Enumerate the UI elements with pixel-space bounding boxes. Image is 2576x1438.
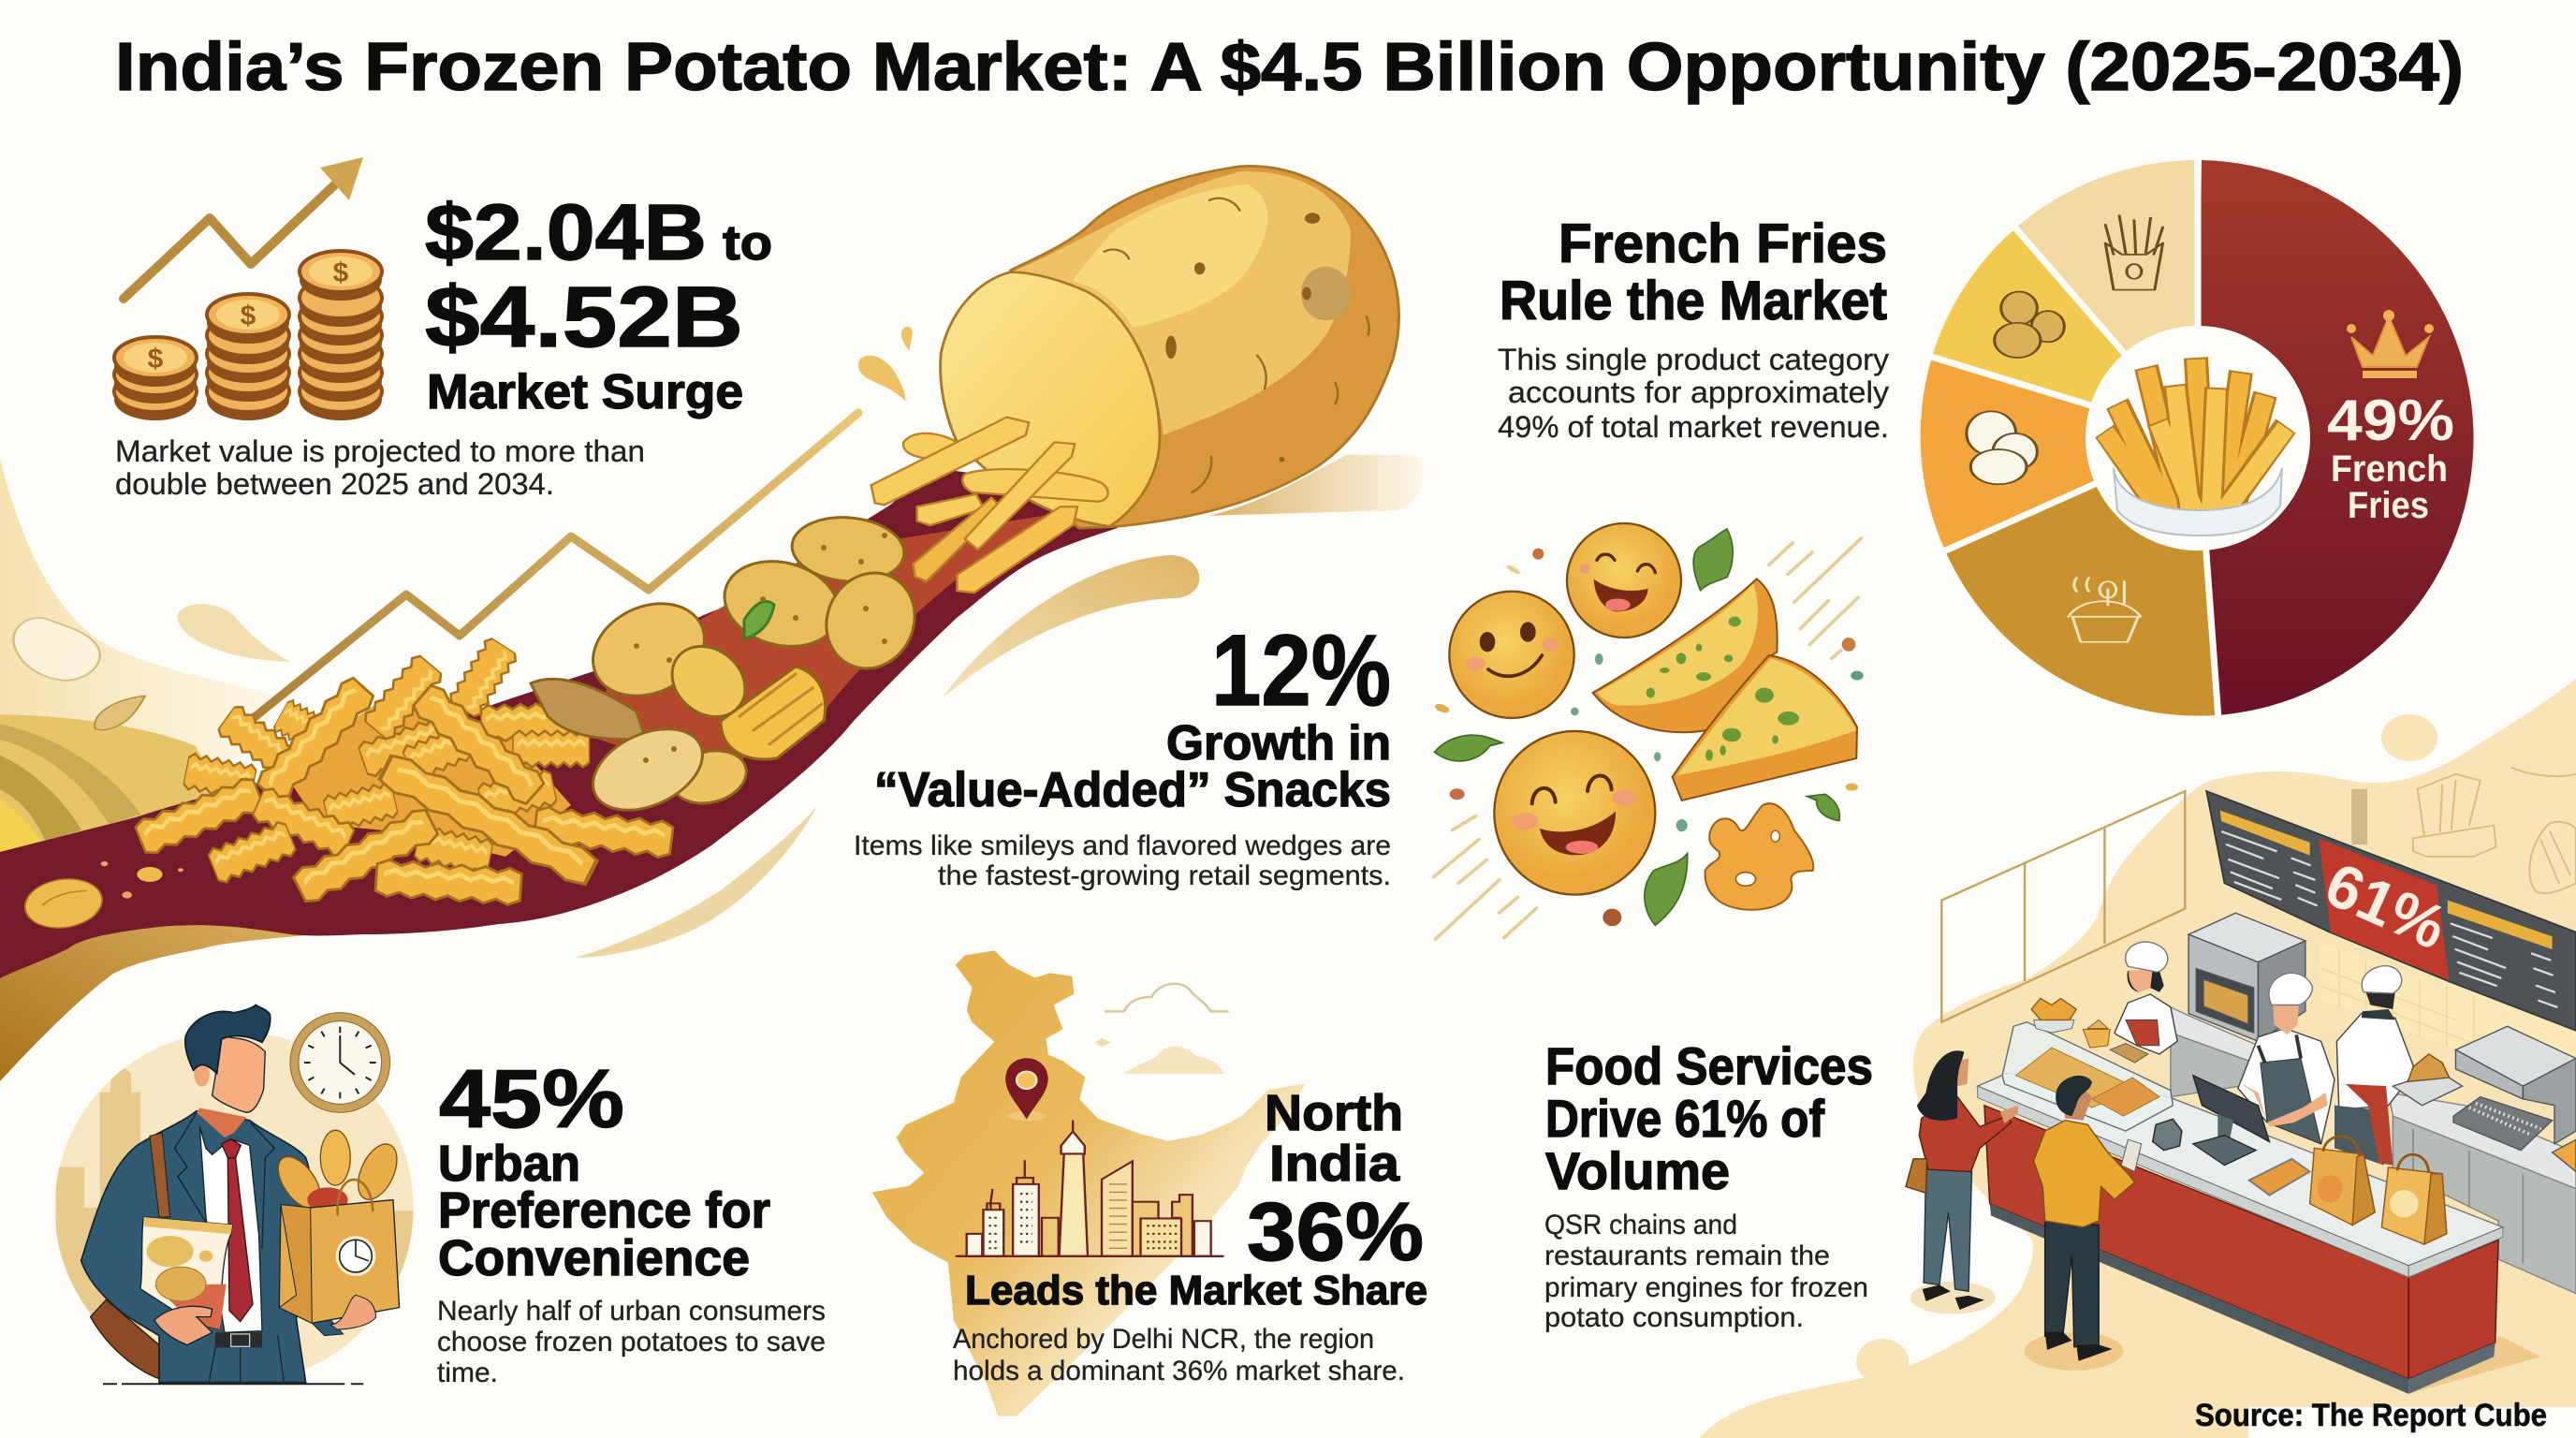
heading: Preference for [438,1182,770,1239]
icon: smiley potato laughing [1567,523,1681,638]
customer man [2025,1076,2142,1371]
display case with food [2002,999,2173,1131]
heading: Rule the Market [1500,271,1887,331]
map of India [872,950,1305,1416]
illustration: commuter with groceries [54,1005,415,1384]
icon: smiley potato large [1494,731,1655,895]
big stat: 12% [1211,613,1391,726]
pie label: 49% [2327,389,2454,453]
source strip [2248,1407,2576,1438]
headline value: $4.52B [425,270,743,365]
icon: potatoes [1967,411,2037,484]
ribbon: inner red glow [599,515,1048,777]
cream swoosh left [178,604,290,662]
ribbon: maroon flow [0,468,1118,978]
heading [1545,1036,1873,1200]
headline value: to [723,216,772,271]
body text [1544,1210,1868,1333]
icon: seasoned wedge [1593,579,1778,732]
pie label: French [2331,448,2448,490]
body text: double between 2025 and 2034. [115,467,554,501]
title: India’s Frozen Potato Market: A $4.5 Billion Opportunity (2025-2034) [115,30,2464,105]
icon: clouds [1095,984,1227,1074]
body text [115,434,645,501]
body text: potato consumption. [1544,1302,1804,1333]
left cream wave [0,459,281,843]
front counter [1978,1073,2541,1394]
back counter [2171,1007,2576,1294]
body text [953,1324,1405,1387]
panel: french fries share [1498,157,2474,719]
icon: coin stacks: $ [333,257,349,288]
heading: French Fries [1559,213,1887,274]
icon: crown [2347,310,2434,378]
body text: accounts for approximately [1508,375,1889,409]
straight fries spilling from potato [871,418,1108,593]
headline value: $2.04B [425,188,707,276]
farm fields [0,696,223,854]
icon: herb leaves [1435,529,1839,925]
big stat: 36% [1247,1185,1424,1278]
heading: India [1269,1136,1400,1192]
icon: fries in bowl [2105,358,2286,536]
icon: coin stacks [114,251,382,420]
body text [854,830,1391,891]
body text: the fastest-growing retail segments. [938,860,1391,891]
oven [2188,913,2305,1041]
grill machine [2453,1026,2576,1171]
heading: Convenience [438,1230,750,1286]
body text: Market value is projected to more than [115,434,645,468]
panel: value-added snacks [854,523,1864,939]
panel: food services [1544,768,2576,1394]
POS terminal [2153,1076,2269,1166]
source credit: Source: The Report Cube [2195,1398,2547,1433]
pie slice: french fries 49% [2198,160,2474,715]
body text: This single product category [1498,343,1889,376]
icon: smiley potato small [1449,592,1574,718]
headline value: Market Surge [427,365,743,419]
body text: primary engines for frozen [1544,1272,1868,1303]
body text: Items like smileys and flavored wedges are [854,830,1391,861]
staff members [2115,942,2463,1166]
icon: seasoned wedge triangle [1673,655,1857,800]
takeaway bags [2310,1137,2447,1244]
heading: Volume [1545,1141,1730,1200]
icon: speed streaks [1434,538,1861,939]
icon: growth arrow [124,157,363,299]
heading: Growth in [1166,716,1391,770]
heading [1265,1085,1403,1192]
body text [437,1296,826,1388]
heading: Food Services [1545,1036,1873,1095]
cream blob accents [1856,714,2437,1384]
heading [874,716,1391,817]
icon: location pin [1005,1058,1048,1122]
icon: coin stacks: $ [148,344,164,374]
body text: choose frozen potatoes to save [437,1327,826,1357]
icon: nuggets [1995,292,2064,358]
pie chart [1921,157,2474,719]
illustration: restaurant counter [1906,768,2576,1394]
board percentage: 61% [2316,849,2457,962]
crinkle-cut fries pile [134,636,674,905]
customer woman [1906,1050,2018,1314]
body text [1498,343,1889,444]
menu board [2206,791,2576,1031]
cream swoosh lower [575,806,817,958]
pie label: Fries [2348,485,2429,526]
heading: North [1265,1085,1403,1141]
icon: snack crumbs [1434,549,1864,926]
body text: Anchored by Delhi NCR, the region [953,1324,1374,1355]
body text: QSR chains and [1544,1210,1737,1240]
heading: “Value-Added” Snacks [874,763,1391,817]
tiled back wall [2319,943,2576,1093]
body text: restaurants remain the [1544,1240,1830,1271]
panel: market surge [114,157,772,501]
icon: wall clock [290,1013,390,1112]
heading: Urban [438,1136,580,1192]
potato chip and crumbs on ribbon [12,861,183,937]
subheading: Leads the Market Share [965,1268,1427,1313]
body text: time. [437,1357,498,1388]
heading [438,1136,770,1286]
ribbon: gold under-band [0,917,318,1081]
icon: letter-shaped potato snack [1705,803,1813,910]
headline value [425,188,772,419]
potato chunks and chips on ribbon [531,513,930,827]
food tray [2249,1159,2310,1196]
heading [1500,213,1887,331]
potato illustration [941,166,1424,698]
rising trend line [250,413,858,721]
wall windows [1941,791,2185,1022]
body text: holds a dominant 36% market share. [953,1356,1405,1387]
pie label [2327,389,2454,526]
pillar [2351,789,2367,844]
right cream blob [1699,679,2576,1438]
icon: coin stacks: $ [241,301,256,331]
body text: 49% of total market revenue. [1498,410,1889,444]
icon: food box [2069,578,2141,642]
icon: city skyline [956,1121,1223,1256]
ghost food icons [2413,768,2576,893]
panel: north india [872,950,1427,1416]
heading: Drive 61% of [1545,1089,1824,1148]
ghost potato [13,618,100,681]
big stat: 45% [439,1052,624,1145]
icon: fries box [2105,215,2163,290]
body text: Nearly half of urban consumers [437,1296,826,1327]
panel: urban convenience [54,1005,826,1388]
splash drops [858,327,913,401]
